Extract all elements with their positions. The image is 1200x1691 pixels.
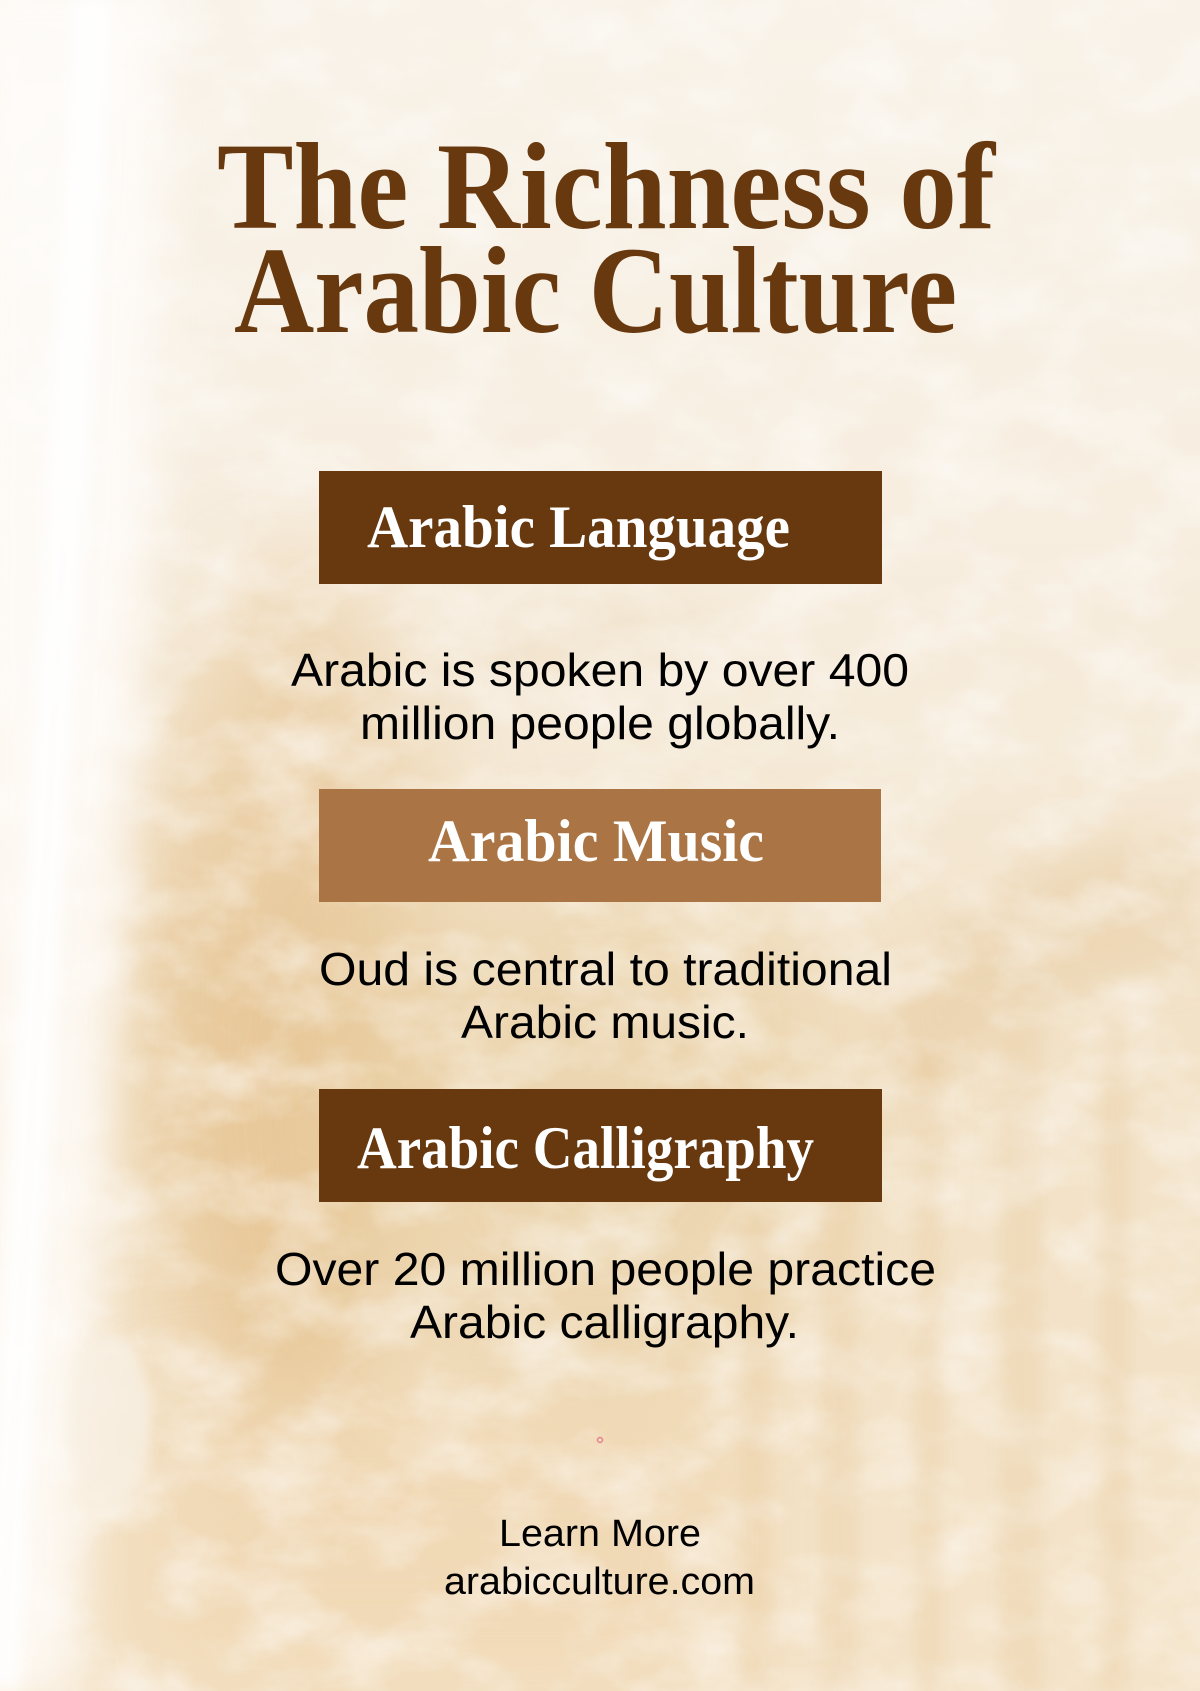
text: Arabic Music fact: Arabic music. bbox=[461, 996, 749, 1048]
heading bar: Arabic Language: Arabic Language bbox=[367, 494, 790, 560]
title bbox=[217, 118, 997, 359]
section: Arabic Calligraphy bbox=[275, 1089, 936, 1348]
text: Arabic Music fact bbox=[319, 943, 892, 1048]
footer: learn more bbox=[444, 1513, 755, 1603]
title: The Richness of bbox=[217, 118, 997, 255]
heading bar: Arabic Music bbox=[319, 789, 881, 902]
heading bar: Arabic Language bbox=[319, 471, 882, 584]
section: Arabic Language bbox=[291, 471, 909, 749]
text: Arabic Calligraphy fact: Over 20 million people practice bbox=[275, 1243, 936, 1295]
footer: learn more: Learn More bbox=[499, 1513, 701, 1555]
text: Arabic Language fact bbox=[291, 644, 909, 749]
heading bar: Arabic Calligraphy: Arabic Calligraphy bbox=[357, 1115, 814, 1181]
text: Arabic Calligraphy fact: Arabic calligraphy. bbox=[410, 1296, 799, 1348]
icon: small dot bbox=[598, 1438, 602, 1442]
text: Arabic Calligraphy fact bbox=[275, 1243, 936, 1348]
heading bar: Arabic Music: Arabic Music bbox=[428, 808, 764, 874]
title: Arabic Culture bbox=[234, 222, 957, 359]
section: Arabic Music bbox=[319, 789, 892, 1048]
heading bar: Arabic Calligraphy bbox=[319, 1089, 882, 1202]
text: Arabic Music fact: Oud is central to traditional bbox=[319, 943, 892, 995]
text: Arabic Language fact: Arabic is spoken by over 400 bbox=[291, 644, 909, 696]
text: Arabic Language fact: million people globally. bbox=[360, 697, 840, 749]
footer: learn more: arabicculture.com bbox=[444, 1561, 755, 1603]
